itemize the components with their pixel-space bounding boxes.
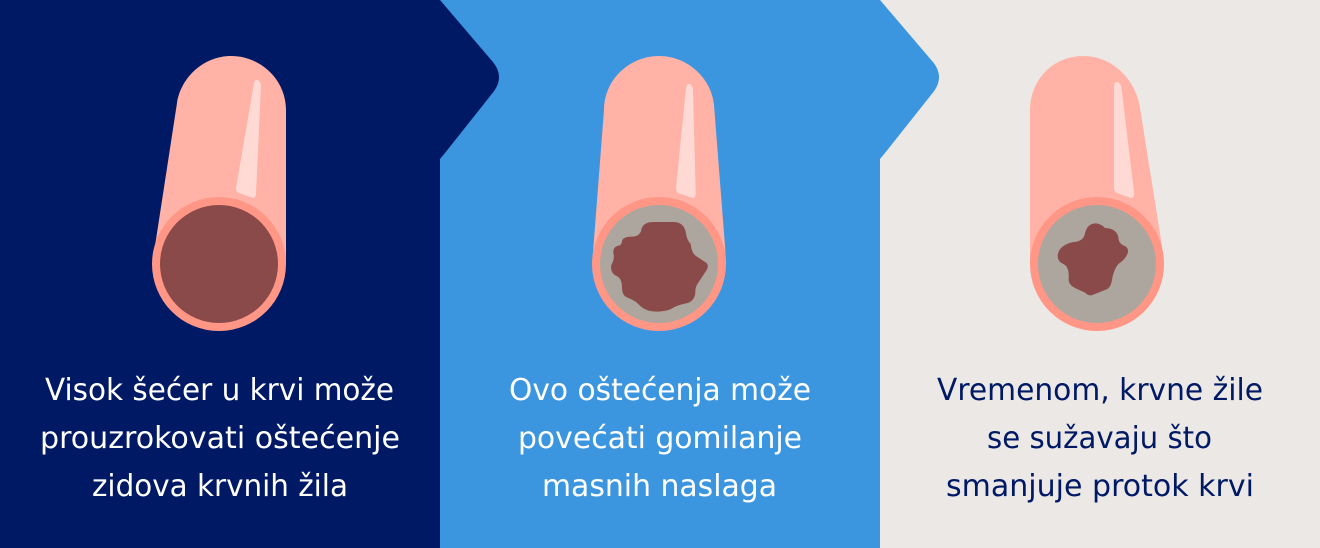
text: step 1 caption [40,373,400,504]
text: step 3 caption: smanjuje protok krvi [946,469,1254,504]
text: step 3 caption [937,373,1263,504]
text: step 1 caption: Visok šećer u krvi može [45,373,394,408]
text: step 1 caption: zidova krvnih žila [92,469,348,504]
text: step 2 caption: masnih naslaga [542,469,777,504]
icon: healthy blood vessel [152,56,286,331]
panel: step 2 fatty deposits [440,0,939,548]
icon: vessel with fatty deposits [592,56,726,331]
panel: step 1 damaged vessel walls [0,0,499,548]
text: step 2 caption [509,373,811,504]
text: step 2 caption: povećati gomilanje [518,421,802,456]
icon: narrowed blood vessel [1030,56,1164,331]
panel: step 3 narrowed vessel [880,0,1320,548]
text: step 2 caption: Ovo oštećenja može [509,373,811,408]
text: step 3 caption: se sužavaju što [987,421,1212,456]
text: step 1 caption: prouzrokovati oštećenje [40,421,400,456]
text: step 3 caption: Vremenom, krvne žile [937,373,1263,408]
